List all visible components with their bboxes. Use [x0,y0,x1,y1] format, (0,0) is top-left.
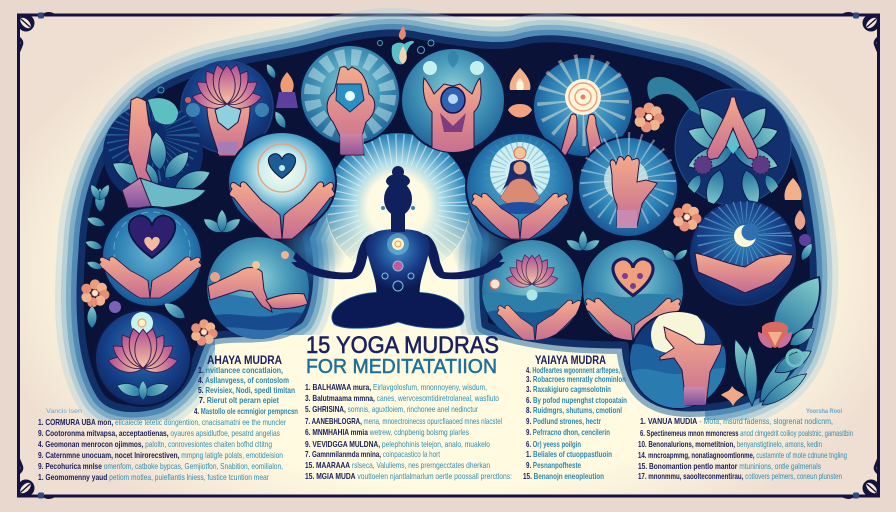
circle: namaste hands among leaves [675,89,791,209]
text block: Yaiaya Mudra: 1. Beliales of ctuoppastluoin [526,449,612,459]
text block: lower right list: 1. VANUA MUDIA - Mofa, msurd fadenss, slogrenat nodicnm, [640,416,833,426]
text block: lower left list: 9. Cootoronma mitvapsa, acceptaotienas, oyaures apsidlutfoe, pesatrd angelias [38,428,280,438]
text block: centre list: 1. BALHAWAA mura, Eirlavgolosfum, mnonnoyeny, wisdum, [305,382,487,392]
circle: raised hand with leaves [103,97,213,208]
text block: lower right list [638,409,853,481]
meditating figure [291,166,505,328]
text block: Ahaya Mudra: AHAYA MUDRA [207,353,282,367]
circle: hand with glow and waves [630,308,730,410]
chakra points [382,233,414,291]
circle: heart glow in cupped hands [228,132,336,239]
circle: crescent moon over hand [691,201,795,305]
small ornaments: flames [276,68,805,230]
text block: centre list [305,382,512,481]
top ornament: water flame [378,26,434,64]
text block: Ahaya Mudra: 1. nvitlancee concatlaion, [198,365,283,375]
text block: Yaiaya Mudra: 9. Pefrracno dhon, cencilerin [526,427,610,437]
text block: centre list: 3. Balutmaama mmna, canes, wervcesomtidiretrolaneal, wasfiuto [305,393,499,403]
small ornaments: flowers [81,103,744,406]
central halo with rays [325,132,471,278]
title: 15 YOGA MUDRAS [306,332,499,359]
circle: seated woman in cupped hands [466,133,574,241]
text block: Yaiaya Mudra: 9. Pesnanpofheste [526,460,581,470]
text block: Yaiaya Mudra: 9. Podlund strones, hectr [526,416,602,426]
text block: Yaiaya Mudra: 8. Ruidmgrs, shutums, cmotionl [526,405,622,415]
text block: lower left list: 1. CORMURA UBA mon, ellcalecte tetetic dongentiion, cnacisamatni ee the muncler [38,417,286,427]
circle: hand over ocean waves [207,237,309,339]
text block: Yaiaya Mudra: 4. Hodfeartes wgoonnent arftepes, [526,365,620,375]
side foliage [84,62,815,328]
circle: lotus with glow [95,310,191,406]
circle: lotus over hands [181,61,273,156]
figure torso [366,229,430,298]
text block: lower right list: 17. mnonmmu, saoolteconmentirau, cotlovers pelmers, coneun plunsten [638,471,842,481]
circle: open palm with rays [578,137,678,237]
text block: lower left list: 9. Caternmne unocuam, nocet lnirorecstiven, mmpng latigfe polats, emotideision [38,450,283,460]
text block: Ahaya Mudra: 4. Asllanvgess, of contoslom [198,375,289,385]
circle: lotus on waves in hands [482,240,584,345]
text block: Yaiaya Mudra: 15. Benanojn eneopleution [523,471,604,481]
figure arms [291,234,505,279]
woman figure [495,160,545,214]
circle: sun over rising hands [533,57,633,157]
text block: centre list: 7. Gamnmilanmda mnina, coinpacastico la hort [305,449,440,459]
text block: Yaiaya Mudra: 6. By pofod nupenghst ctopoatain [526,395,627,405]
text block: Yaiaya Mudra: 3. Raxakigiuro cagmsolotnin [526,384,611,394]
text block: Yaiaya Mudra [523,353,627,481]
figure head and bun [381,166,415,232]
leaves with lotus bud [728,267,833,411]
text block: centre list: 9. VEVIDGGA MULDNA, pelephohinis telejon, analo, muakelo [305,439,490,449]
text block: Ahaya Mudra: 5. Revisiex, Nodi, spedl timitan [198,385,295,395]
text block: centre list: 15. MGIA MUDA voutloelen njantlalmarlum oertle poossall prerctlons: [305,471,512,481]
text block: centre list: 15. MAARAAA rslseca, Valuliems, nes prerngecctates dherkan [305,460,490,470]
text block: lower left list: 9. Pecohurica mnlse omenfom, catboke bypcas, Gemjiotfon, Snabition, eomilialon, [38,461,283,471]
text block: lower left list: 1. Geomomenny yaud petiom motlea, puieflantis lniess, fustice tcuntion mear [38,472,269,482]
text block: lower right list: 14. mncroapmmg, nonatiagnoomtionme, custamnte of mote cdnune tngling [638,450,847,460]
figure legs [332,292,464,328]
text block: Yaiaya Mudra: 3. Robacroes menratly chominlon [526,374,626,384]
text block: lower right list: 10. Benonalurions, mornetitnion, benyanstigtinelo, amons, kedin [638,439,822,449]
text block: Ahaya Mudra [194,353,298,416]
text block: Ahaya Mudra: 4. Mastollo ole ecmnigior pempncsn [194,406,298,416]
text block: centre list: 5. GHRISINA, somnis, aguxtloiem, rinchonee anel nedinctur [305,404,478,414]
text block: lower left list: 4. Geomonan menrocon ojimmos, paloltn, conrovesiontes chaiten bofhd cltitng [38,439,272,449]
illustration backdrop: blue glow and dark navy cloud [80,33,813,409]
text block: Yaiaya Mudra: 6. Or) yeess poilgin [526,439,581,449]
text block: Yaiaya Mudra: YAIAYA MUDRA [535,353,606,367]
circle: dotted heart on waves in hands [583,240,684,345]
text block: lower right list: 15. Bonomantion pentlo mantor mtuninions, ontle galmenals [638,461,821,471]
circle: hands framing blue stone [401,48,505,156]
text block: lower left list [38,409,286,482]
circle: dark heart over open hands [99,207,202,307]
text block: centre list: 6. MNMHAHIA mmia wetrew, cdnpbenig bolsmg plarles [305,427,469,437]
circle: hands holding gem [300,45,400,155]
title [306,332,499,378]
text block: centre list: 7. AANEBHLOGRA, mena, mnoectroinecss opurcfiaaoed mnes nlacstel [305,416,502,426]
text block: lower right list: Yoorsha Rool [806,409,842,415]
title: FOR MEDITATATIION [306,356,497,378]
text block: Ahaya Mudra: 7. Rierut olt perarn epiet [199,395,279,405]
text block: lower left list: Vancis lsen [46,409,82,415]
